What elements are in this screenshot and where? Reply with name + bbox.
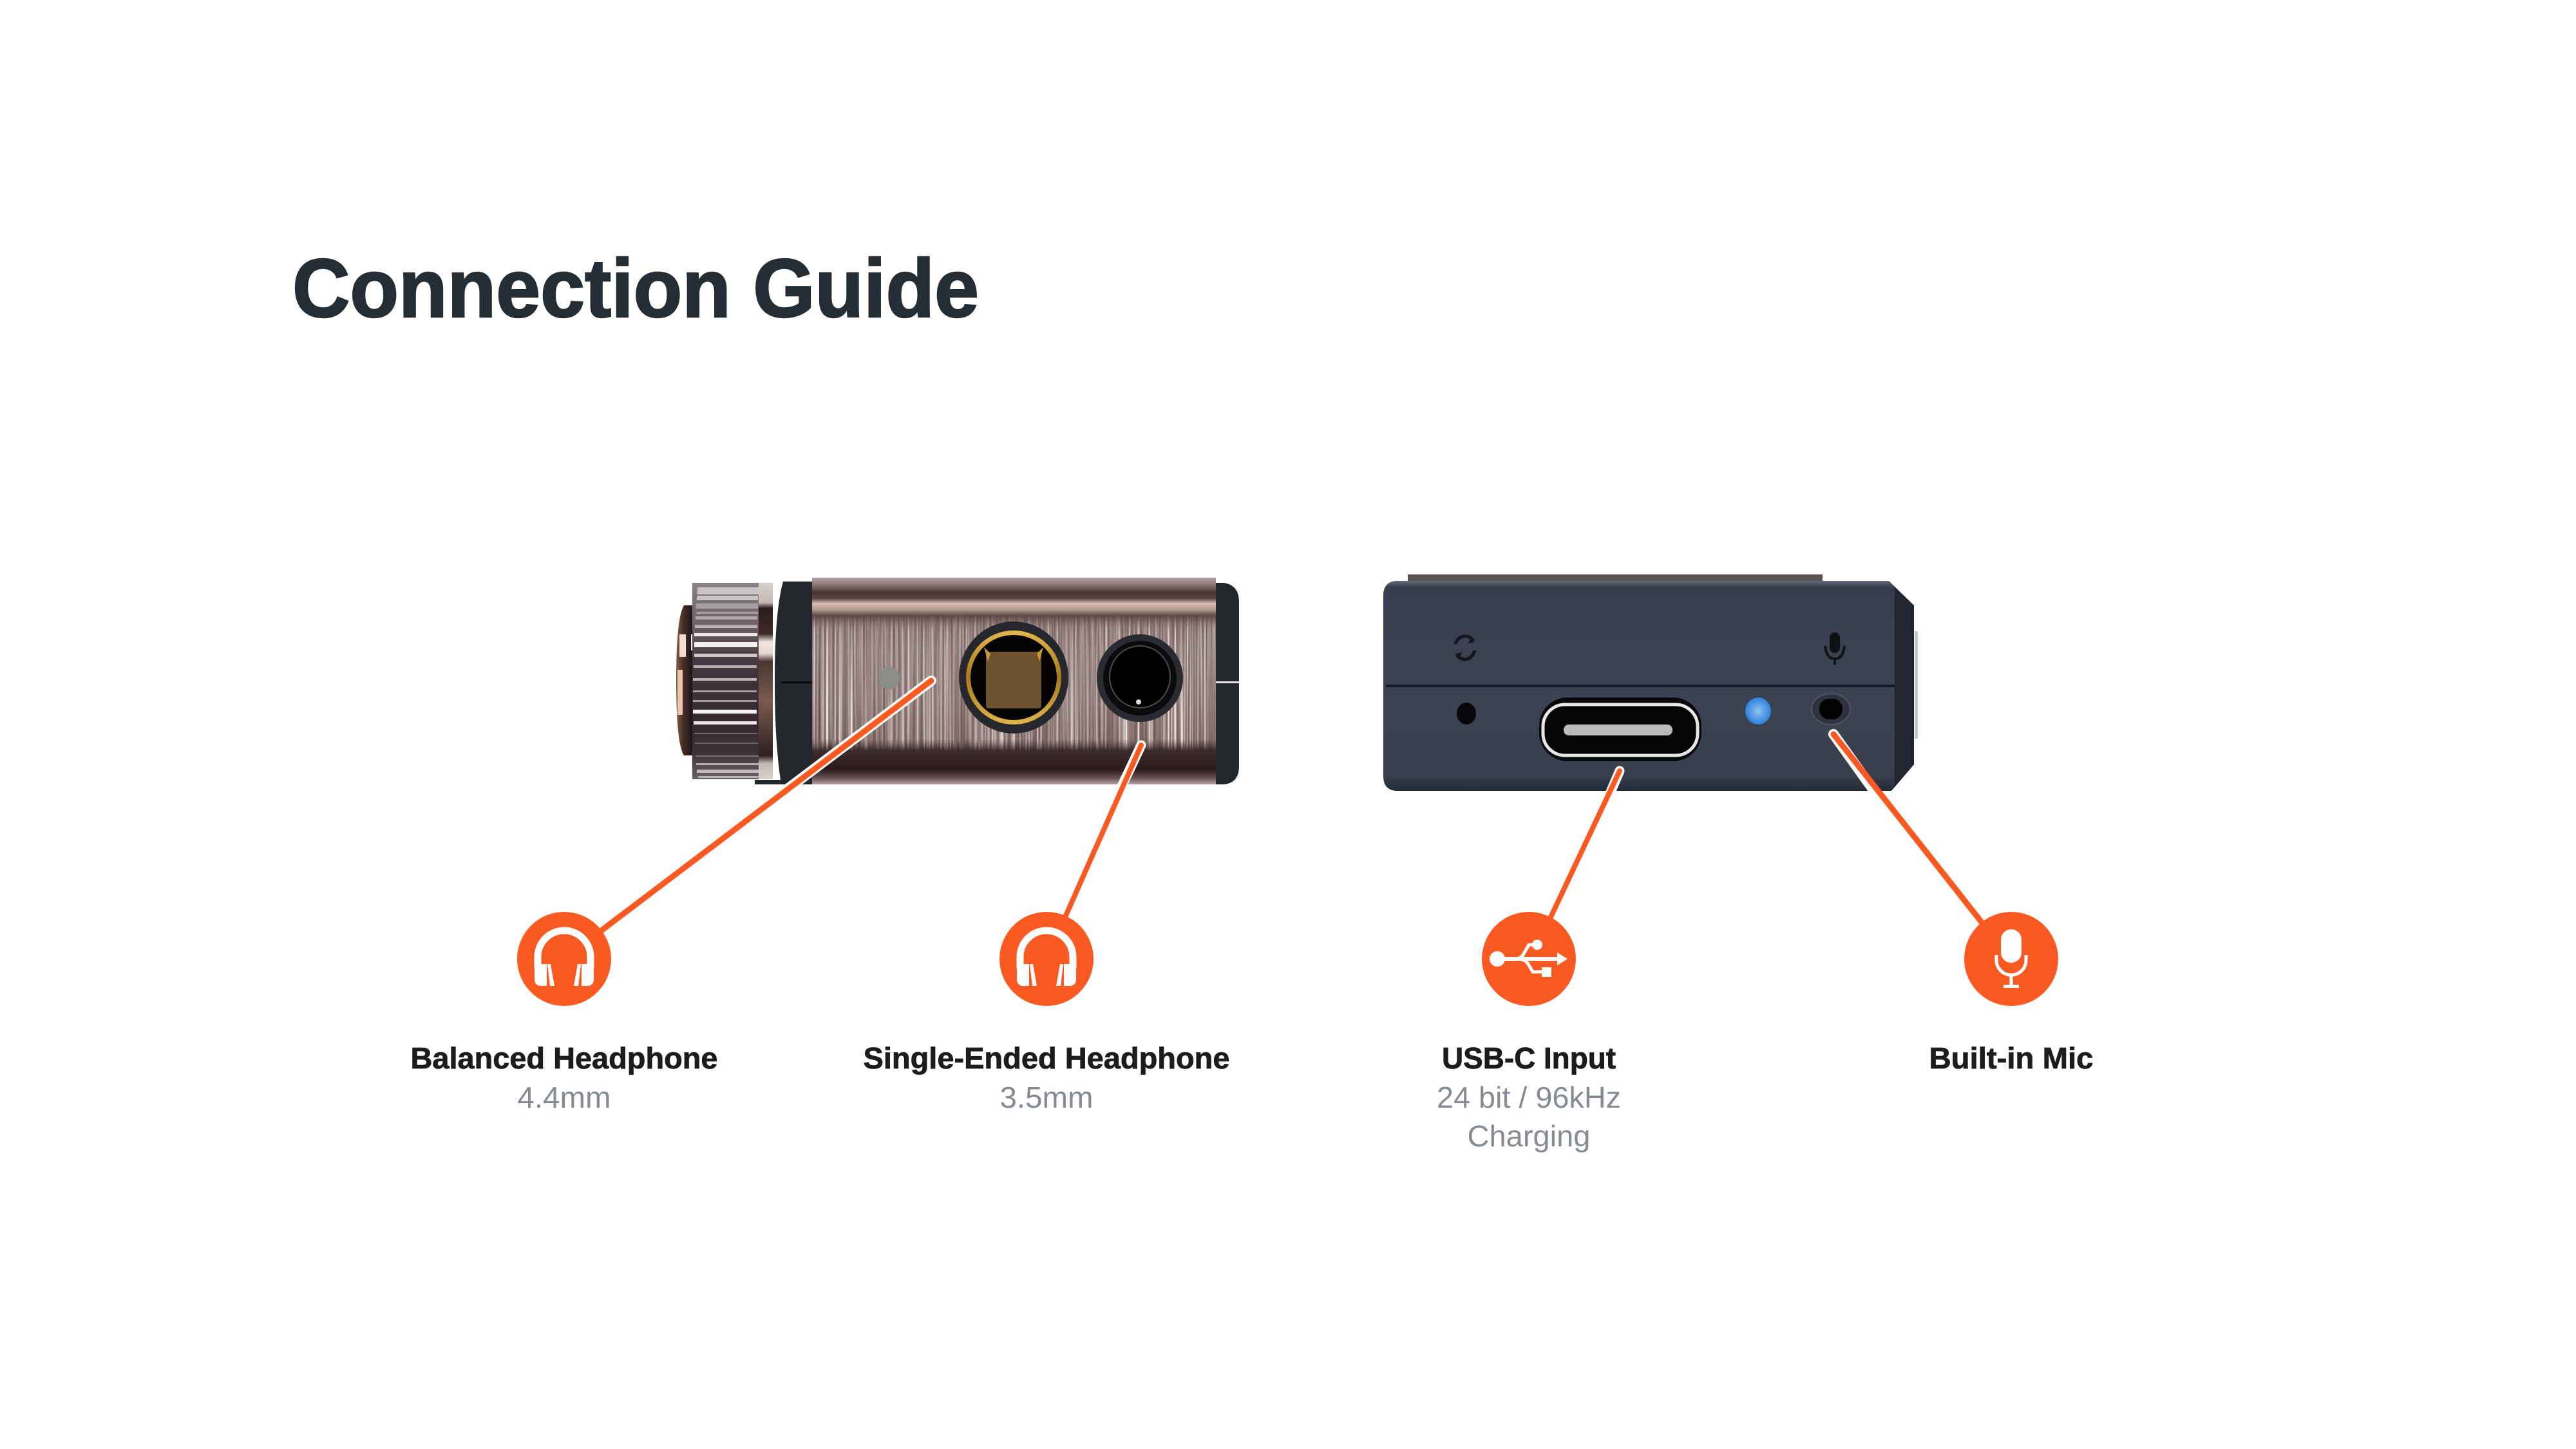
left bumper bbox=[755, 582, 812, 784]
right bumper bbox=[1216, 583, 1239, 784]
reset icon bbox=[1455, 636, 1475, 659]
main shell bbox=[1383, 581, 1914, 791]
label: single-ended headphone: Single-Ended Headphone bbox=[863, 1041, 1230, 1075]
label: USB-C input: 24 bit / 96kHz bbox=[1437, 1081, 1621, 1114]
mic hole bbox=[1812, 694, 1850, 724]
small hole bbox=[1457, 703, 1476, 724]
leader line: single-ended bbox=[1065, 745, 1141, 917]
label: USB-C input: USB-C Input bbox=[1442, 1041, 1616, 1075]
indicator hole bbox=[879, 667, 900, 690]
4.4mm jack bbox=[959, 621, 1068, 734]
top strip bbox=[1408, 574, 1823, 582]
label: built-in mic: Built-in Mic bbox=[1929, 1041, 2093, 1075]
rotary knob bbox=[676, 583, 773, 779]
label: balanced headphone bbox=[411, 1041, 717, 1114]
mic marking bbox=[1825, 632, 1844, 665]
device: brushed metal end view bbox=[676, 578, 1239, 784]
label: USB-C input: Charging bbox=[1467, 1119, 1591, 1153]
title: Connection Guide bbox=[292, 243, 979, 335]
label: balanced headphone: 4.4mm bbox=[518, 1081, 611, 1114]
label: USB-C input bbox=[1437, 1041, 1621, 1153]
icon: USB bbox=[1482, 912, 1576, 1006]
seam bbox=[1386, 685, 1895, 687]
label: single-ended headphone bbox=[863, 1041, 1230, 1114]
dark end chamfer bbox=[1895, 587, 1914, 787]
label: single-ended headphone: 3.5mm bbox=[999, 1081, 1094, 1114]
icon: microphone bbox=[1964, 912, 2058, 1006]
label: balanced headphone: Balanced Headphone bbox=[411, 1041, 717, 1075]
blue LED bbox=[1745, 697, 1771, 724]
3.5mm jack bbox=[1097, 634, 1183, 722]
leader line: balanced bbox=[602, 681, 931, 930]
leader line: USB-C bbox=[1551, 771, 1620, 917]
pale edge bbox=[1915, 631, 1918, 739]
metal body bbox=[812, 578, 1216, 784]
USB-C port bbox=[1539, 697, 1701, 761]
icon: single-ended headphone bbox=[999, 912, 1094, 1006]
device: navy side view bbox=[1383, 574, 1918, 791]
icon: balanced headphone bbox=[517, 912, 611, 1006]
leader line: mic bbox=[1833, 734, 1982, 922]
